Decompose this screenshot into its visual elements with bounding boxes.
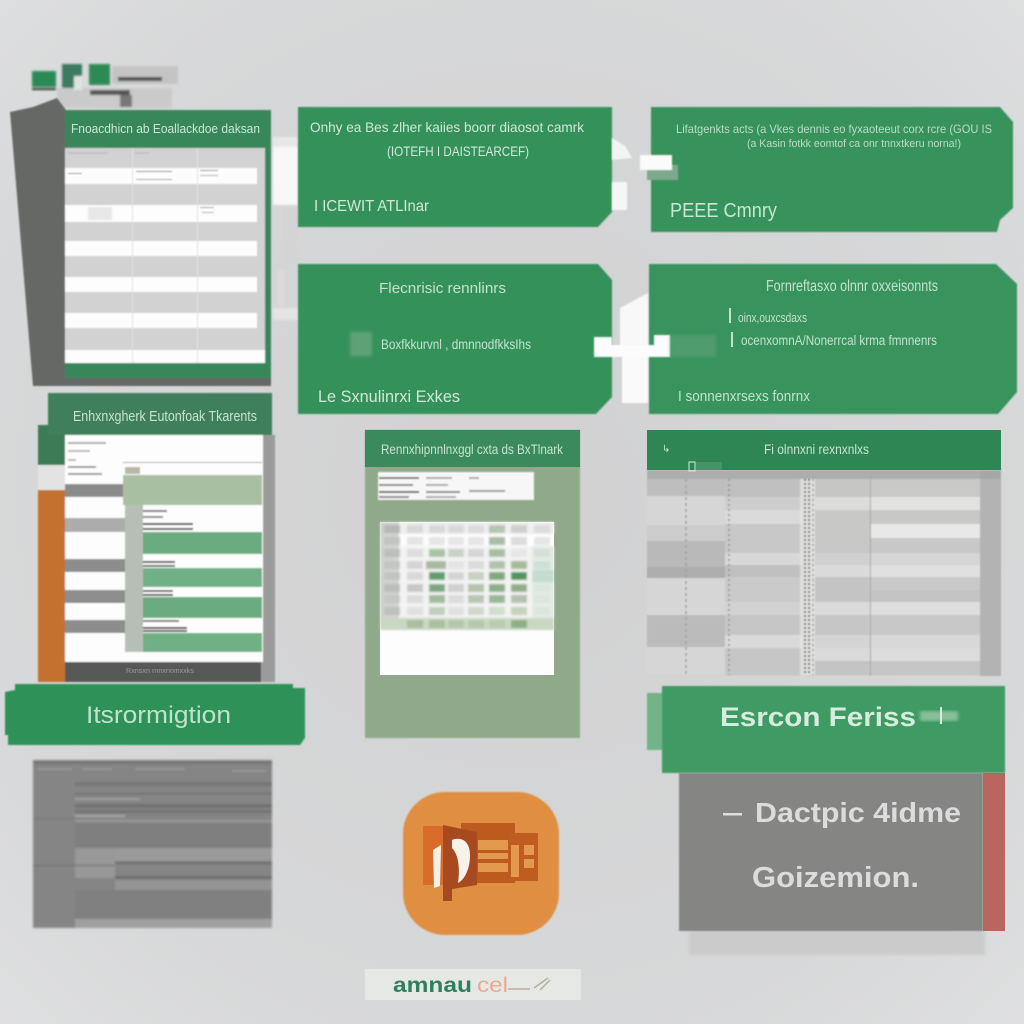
panel: middle-row right card: [649, 264, 1017, 414]
logo: bottom wordmark: cel: [477, 974, 508, 997]
card title: Onhy ea Bes zlher kaiies boorr diaosot camrk: [310, 119, 585, 135]
column: centre right: [815, 479, 870, 675]
accent: header tick: [920, 707, 958, 724]
arrow: middle connector: [594, 293, 716, 403]
card text: second line: Goizemion.: [752, 862, 919, 894]
side tabs: left of middle column: [273, 137, 301, 320]
table: green overlay rows: [123, 462, 262, 652]
panel: bottom-left log sheet: [33, 760, 272, 928]
panel: Esrcon Feriss header: [647, 686, 1005, 773]
heading bar: right data sheet: ↳: [662, 444, 670, 455]
heading: heat-map sheet: Rennxhipnnlnxggl cxta ds BxTlnark: [381, 441, 564, 457]
card subtitle: top-right: (a Kasin fotkk eomtof ca onr tnnxtkeru norna!): [747, 138, 961, 150]
banner: information: Itsrormigtion: [86, 702, 231, 729]
table: top-left stripes: [65, 148, 265, 363]
logo: bottom wordmark: amnau: [393, 974, 472, 997]
card body: middle-row left: [350, 332, 531, 356]
data block: heat-map sheet: [378, 472, 534, 500]
card label: top-middle: I ICEWIT ATLInar: [314, 198, 430, 215]
heading: lower-left spreadsheet: Enhxnxgherk Eutonfoak Tkarents: [73, 408, 257, 425]
card title: Lifatgenkts acts (a Vkes dennis eo fyxaoteeut corx rcre (GOU IS: [676, 122, 992, 136]
banner: information: [5, 684, 305, 745]
card text: first line: Dactpic 4idme: [755, 797, 961, 828]
card label: top-right: PEEE Cmnry: [670, 200, 777, 222]
heat map grid: [380, 522, 554, 675]
accent: red edge: [983, 773, 1005, 931]
column: left: [647, 479, 725, 675]
panel: lower-left spreadsheet: [38, 393, 275, 682]
arrow: top connector: [612, 138, 678, 210]
card label: middle-row left: Le Sxnulinrxi Exkes: [318, 387, 460, 406]
heading bar: right data sheet: Fi olnnxni rexnxnlxs: [764, 441, 869, 457]
card subtitle: top-middle: (IOTEFH I DAISTEARCEF): [387, 143, 529, 159]
logo: top-left ribbon fragment: [32, 64, 178, 108]
footer note: lower-left spreadsheet: Rxnsxn rnnxrxxnxxks: [126, 668, 195, 675]
panel: gray detail card: [679, 773, 1005, 955]
heading text: Esrcon Feriss: [720, 702, 916, 732]
card title: Flecnrisic rennlinrs: [379, 280, 506, 297]
card title: Fornreftasxo olnnr oxxeisonnts: [766, 278, 938, 295]
panel: middle-row left card: [298, 264, 612, 414]
card list: middle-row right: ocenxomnA/Nonerrcal krma fmnnenrs: [741, 333, 937, 348]
icon: orange presentation app: [403, 792, 559, 935]
column: far right: [870, 479, 980, 675]
card list: middle-row right: [729, 308, 937, 348]
panel: middle heat-map sheet: [365, 430, 580, 738]
card label: middle-row right: I sonnenxrsexs fonrnx: [678, 388, 810, 405]
heading bar: right data sheet: [647, 430, 1001, 471]
panel: top-right card: [651, 107, 1013, 232]
card body: middle-row left: Boxfkkurvnl , dmnnodfkksIhs: [381, 336, 531, 352]
table: base rows: [65, 435, 263, 662]
logo: bottom wordmark: [365, 969, 581, 1000]
column: centre left: [725, 479, 802, 675]
heading: top-left spreadsheet: Fnoacdhicn ab Eoallackdoe daksan: [71, 121, 260, 136]
panel: top-middle card: [298, 107, 612, 227]
panel: top-left spreadsheet: [10, 98, 271, 386]
heading bar: [365, 430, 580, 467]
table: right data sheet: [647, 470, 1001, 676]
card list: middle-row right: oinx,ouxcsdaxs: [738, 310, 807, 325]
